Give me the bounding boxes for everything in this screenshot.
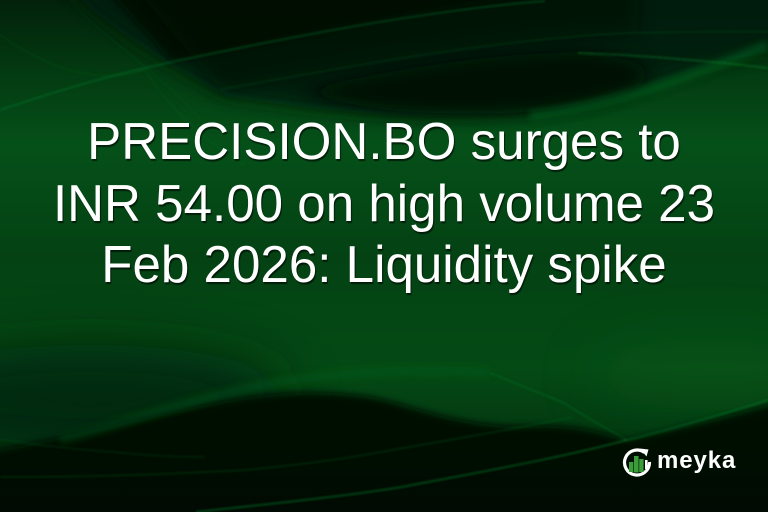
- title: PRECISION.BO surges to: [87, 113, 681, 171]
- icon: ring with green bars: [622, 448, 652, 477]
- logo: meyka: [622, 447, 736, 477]
- title: INR 54.00 on high volume 23: [53, 174, 715, 232]
- wordmark: meyka: [657, 447, 736, 474]
- title: Feb 2026: Liquidity spike: [101, 236, 667, 294]
- title: [53, 113, 715, 296]
